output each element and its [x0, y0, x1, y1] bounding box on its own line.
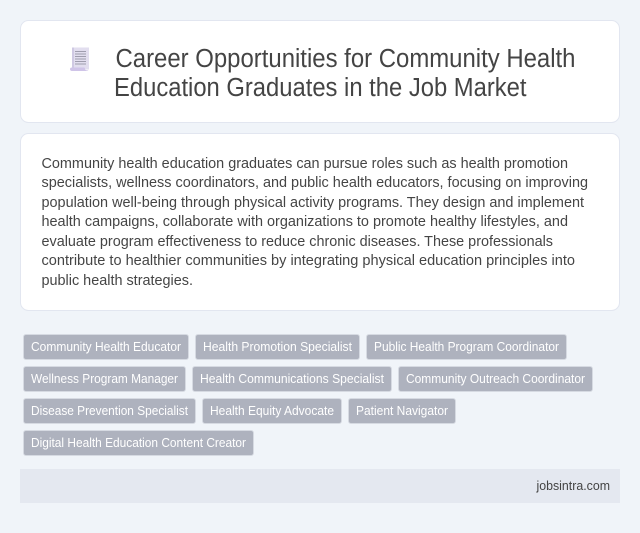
footer source text: jobsintra.com: [536, 478, 610, 493]
panel: career tags: [24, 334, 592, 456]
tag: Digital Health Education Content Creator: Digital Health Education Content Creator: [31, 435, 247, 450]
icon: document scroll: [70, 48, 89, 71]
tag: Health Equity Advocate: Health Equity Advocate: [210, 403, 334, 418]
text block: description paragraph: health campaigns, collaborate with organizations to promote healthy lifestyles, and: [42, 214, 568, 230]
text block: description paragraph: Community health education graduates can pursue roles such as health promotion: [42, 156, 568, 172]
tag: Wellness Program Manager: Wellness Program Manager: [31, 371, 179, 386]
tag: Patient Navigator: Patient Navigator: [356, 403, 449, 418]
tag: Community Outreach Coordinator: Community Outreach Coordinator: [406, 371, 586, 386]
panel: title header: [20, 20, 620, 122]
footer: [20, 469, 620, 503]
tag: Disease Prevention Specialist: [24, 398, 196, 424]
tag: Community Health Educator: Community Health Educator: [31, 339, 182, 354]
tag: Health Promotion Specialist: Health Promotion Specialist: [203, 339, 352, 354]
tag: Patient Navigator: [348, 398, 456, 424]
panel: description: [20, 134, 620, 310]
tag: Wellness Program Manager: [24, 366, 186, 392]
tag: Health Communications Specialist: Health Communications Specialist: [200, 371, 384, 386]
tag: Community Health Educator: [24, 334, 188, 360]
text block: description paragraph: evaluate program effectiveness to reduce chronic diseases. These professionals: [42, 234, 553, 250]
tag: Digital Health Education Content Creator: [24, 430, 254, 456]
text block: description paragraph: population well-being through physical activity programs. They design and implement: [42, 195, 585, 211]
tag: Community Outreach Coordinator: [398, 366, 592, 392]
tag: Public Health Program Coordinator: [366, 334, 566, 360]
tag: Public Health Program Coordinator: Public Health Program Coordinator: [374, 339, 560, 354]
title: [114, 45, 576, 102]
text block: description paragraph: public health strategies.: [42, 273, 193, 289]
title: Education Graduates in the Job Market: [114, 74, 526, 102]
tag: Health Promotion Specialist: [196, 334, 360, 360]
tag: Health Communications Specialist: [192, 366, 392, 392]
tag: Health Equity Advocate: [202, 398, 342, 424]
text block: description paragraph: specialists, wellness coordinators, and public health educators, focusing on improving: [42, 175, 588, 191]
title: Career Opportunities for Community Health: [116, 45, 576, 73]
text block: description paragraph: contribute to healthier communities by integrating physical education principles into: [42, 253, 575, 269]
tag: Disease Prevention Specialist: Disease Prevention Specialist: [31, 403, 188, 418]
text block: description paragraph: [42, 156, 588, 289]
